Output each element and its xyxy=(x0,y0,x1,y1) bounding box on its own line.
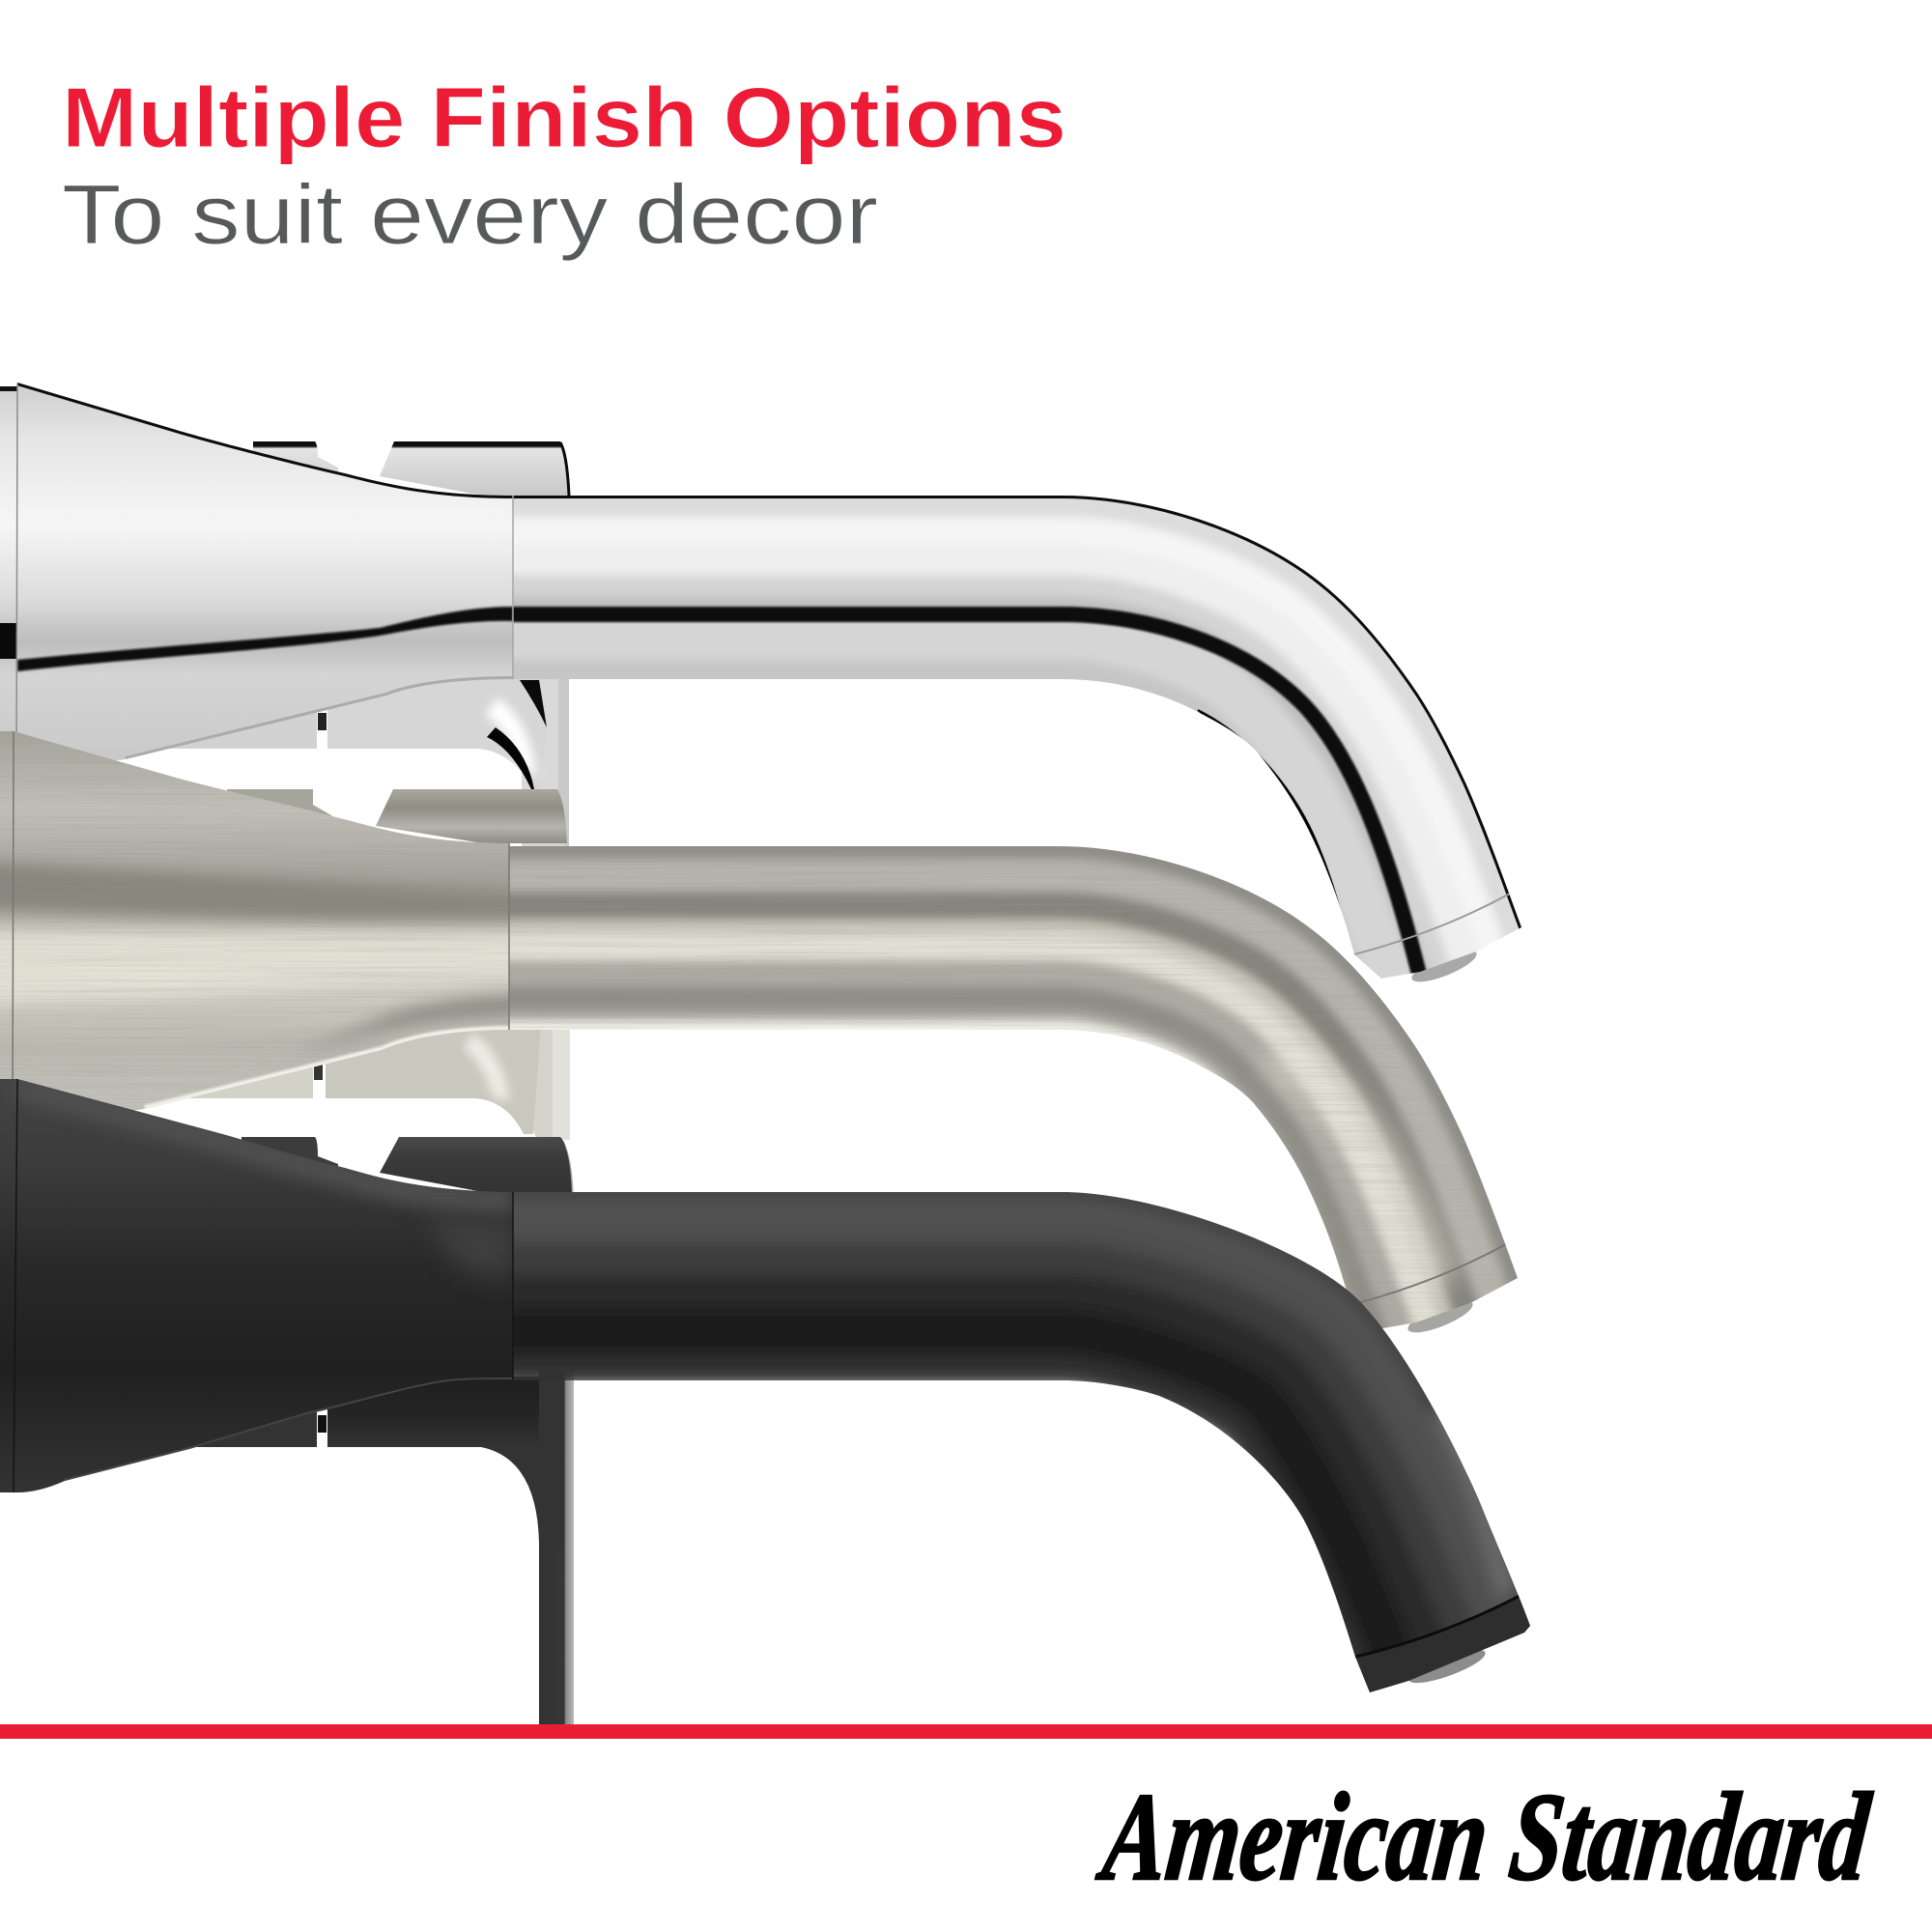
faucet: chrome finish xyxy=(0,377,1546,995)
black notch reflection xyxy=(318,1415,327,1433)
black nozzle tip xyxy=(1355,1596,1536,1695)
black bell body xyxy=(0,1072,522,1497)
chrome lower left handle xyxy=(126,676,317,749)
black bell top sheen xyxy=(17,1087,513,1200)
chrome bell body xyxy=(0,377,522,782)
nickel brushed texture xyxy=(510,927,1439,1317)
chrome handle reflection xyxy=(487,727,534,789)
black lower right handle shading xyxy=(327,1377,539,1449)
nickel bell dark band xyxy=(0,860,541,921)
chrome spout inner reflection xyxy=(1197,709,1343,914)
nickel aerator xyxy=(1405,1294,1476,1339)
nickel bell brushed texture xyxy=(0,794,508,1109)
nickel left seam xyxy=(13,731,14,1125)
subheading: To suit every decor: To suit every decor xyxy=(62,168,878,262)
chrome handle highlight xyxy=(486,697,537,778)
black left seam xyxy=(14,1079,17,1492)
chrome spout reflection band xyxy=(483,614,1422,985)
nickel notch reflection xyxy=(314,1061,323,1080)
nickel lower left handle xyxy=(126,1024,313,1098)
black escutcheon plate and stem xyxy=(539,1137,574,1724)
nickel nozzle collar xyxy=(1350,1244,1506,1305)
black lower left handle xyxy=(174,1377,317,1447)
chrome aerator xyxy=(1408,944,1480,988)
chrome bell lower edge xyxy=(126,679,513,759)
chrome notch reflection xyxy=(318,713,327,730)
chrome upper right handle xyxy=(380,441,570,496)
chrome bell reflection xyxy=(17,607,513,671)
nickel lower right handle xyxy=(326,1024,541,1134)
nickel upper left handle xyxy=(227,789,336,840)
red divider line xyxy=(0,1724,1932,1739)
black nozzle highlight xyxy=(1439,1410,1507,1594)
heading: Multiple Finish Options: Multiple Finish Options xyxy=(62,70,1066,165)
black bell highlight xyxy=(440,1222,512,1279)
black spout xyxy=(513,1192,1530,1692)
chrome upper reflection xyxy=(520,680,547,727)
nickel plate edge highlight xyxy=(553,1030,570,1140)
chrome left seam xyxy=(16,384,17,773)
faucet: brushed nickel finish xyxy=(0,724,1565,1346)
chrome collar strip reflection xyxy=(0,623,17,659)
nickel spout xyxy=(510,846,1518,1328)
nickel bell lower dark band xyxy=(317,985,508,1049)
chrome spout xyxy=(514,496,1521,979)
chrome plate edge highlight xyxy=(558,676,569,850)
black upper left handle xyxy=(242,1137,338,1174)
nickel upper right handle xyxy=(376,789,567,843)
black nozzle collar xyxy=(1355,1596,1520,1657)
nickel escutcheon plate xyxy=(522,789,565,1140)
chrome collar top edge xyxy=(0,386,17,391)
nickel bell lower edge xyxy=(145,1030,509,1109)
chrome spout edge line xyxy=(514,496,1521,929)
nickel bend highlight xyxy=(1275,1053,1439,1285)
chrome handle right edge xyxy=(560,442,569,496)
chrome right seam xyxy=(512,496,514,679)
chrome bell top edge xyxy=(17,383,513,496)
black right seam xyxy=(512,1192,514,1379)
nickel bell light band xyxy=(0,932,541,1005)
nickel right seam xyxy=(508,843,510,1030)
black upper right handle xyxy=(380,1137,572,1192)
faucet: matte black finish xyxy=(0,1072,1555,1724)
chrome lower right handle xyxy=(327,676,547,789)
black lower right handle base xyxy=(327,1377,564,1546)
chrome nozzle collar xyxy=(1354,894,1510,954)
chrome escutcheon plate xyxy=(522,441,569,850)
black aerator xyxy=(1406,1643,1489,1690)
chrome upper left handle xyxy=(253,441,338,493)
black bell lower edge xyxy=(65,1379,513,1481)
nickel bell body xyxy=(0,731,508,1111)
nickel handle highlight xyxy=(464,1034,510,1101)
